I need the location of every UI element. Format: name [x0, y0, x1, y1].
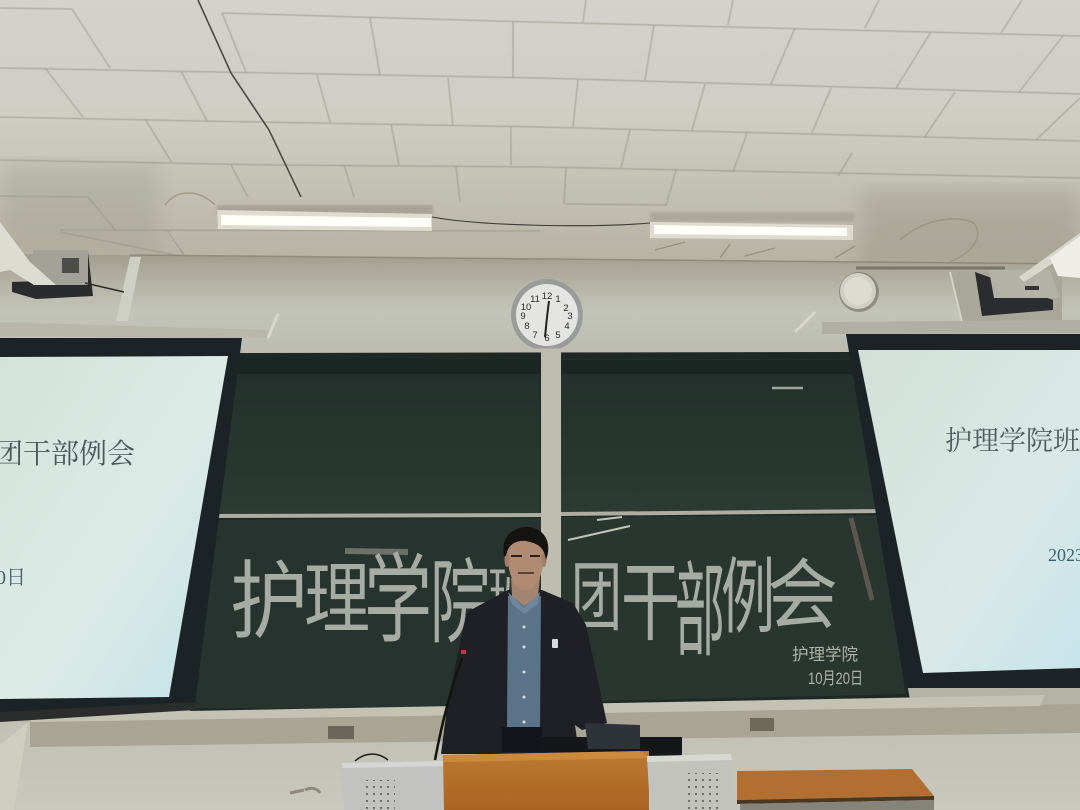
wooden lectern	[443, 751, 649, 810]
chalk writing: title: 班	[488, 563, 538, 625]
computer left	[342, 762, 445, 810]
wire	[432, 217, 650, 226]
chalk writing: title: 理	[304, 557, 370, 643]
neck and head	[511, 578, 540, 606]
chalk writing: title	[230, 546, 838, 670]
crack	[198, 0, 301, 197]
badge	[552, 639, 558, 648]
chalk writing: title: 部	[675, 555, 725, 670]
right projection screen	[795, 312, 1080, 688]
jacket	[441, 590, 607, 754]
chalk writing: title: 例	[721, 551, 775, 644]
chalk writing: signature: 护理学院	[792, 645, 858, 664]
wall clock: 7	[532, 330, 538, 341]
projector right	[975, 233, 1080, 316]
wall clock: 8	[524, 321, 530, 332]
light 2	[650, 212, 854, 240]
wall clock	[511, 279, 583, 351]
microphone	[435, 645, 467, 760]
ceiling lights	[217, 205, 854, 240]
chalk writing: title: 团	[571, 555, 622, 640]
wall clock: 9	[520, 311, 526, 322]
light 1	[217, 205, 433, 231]
computer right	[647, 755, 738, 810]
trousers	[502, 727, 542, 752]
chalk writing: signature	[792, 645, 863, 688]
left projection screen	[0, 314, 278, 714]
wall clock: 6	[544, 333, 550, 344]
presenter	[441, 527, 607, 754]
wall clock: 2	[563, 303, 569, 314]
upper wall	[0, 254, 1080, 350]
chalk writing: title: 学	[364, 546, 432, 655]
podium	[342, 723, 934, 810]
chalk writing: title: 护	[230, 555, 308, 650]
wall clock: 4	[564, 321, 570, 332]
blackboard	[190, 349, 910, 712]
rear equipment	[540, 737, 682, 756]
wall clock: 12	[542, 291, 552, 302]
wall clock: 5	[555, 330, 561, 341]
table	[737, 769, 934, 800]
wall clock: 3	[567, 311, 573, 322]
ceiling	[0, 0, 1080, 270]
wall clock: 1	[555, 294, 561, 305]
chalk writing: title: 院	[430, 553, 490, 655]
water stains	[165, 193, 978, 262]
wall round sensor	[839, 272, 879, 312]
chalk tray and lower wall	[0, 695, 1080, 810]
chalk writing: title: 干	[621, 555, 680, 652]
chalk writing: signature: 10月20日	[808, 669, 863, 688]
wall clock: 10	[521, 302, 531, 313]
shirt	[507, 596, 541, 727]
chalk writing: title: 会	[767, 552, 838, 639]
wall clock: 11	[530, 294, 540, 305]
projector left	[0, 222, 124, 299]
